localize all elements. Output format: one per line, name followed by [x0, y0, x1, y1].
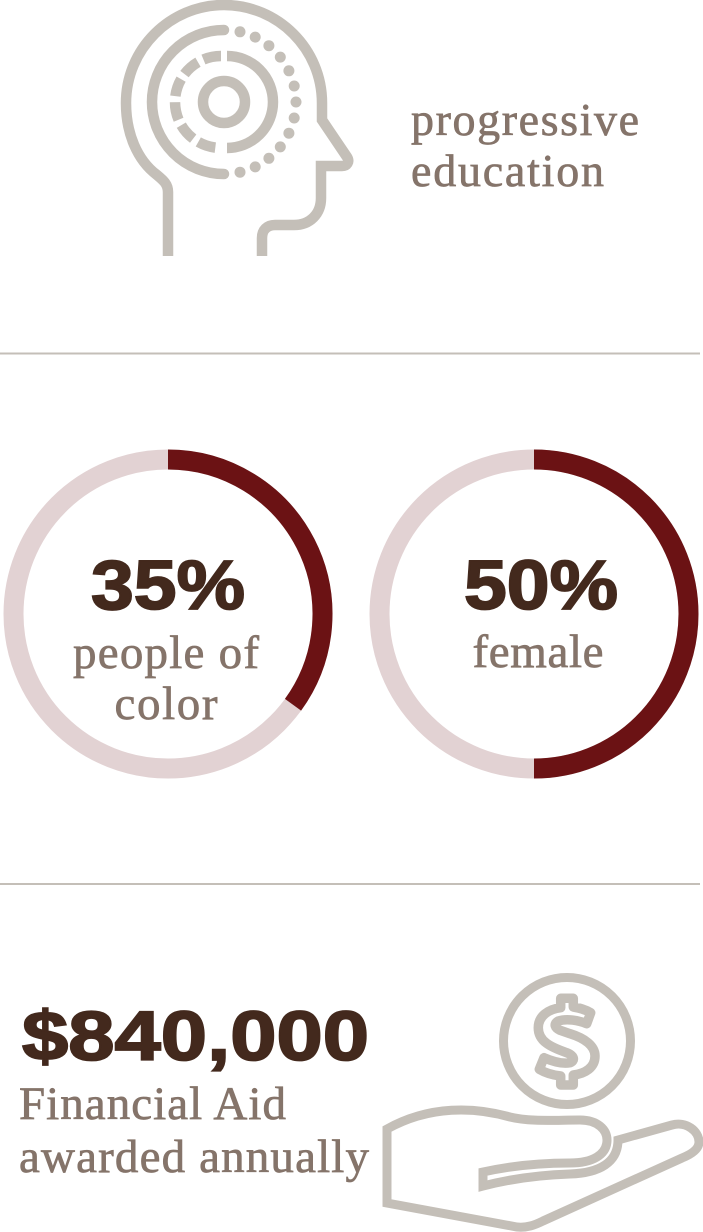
- stat: $840,000 financial aid: awarded annually: [19, 1131, 370, 1183]
- donut chart: 35% people of color: people of: [73, 627, 259, 679]
- heading: progressive education: progressive: [411, 94, 639, 145]
- icon: hand holding coin: [387, 978, 699, 1227]
- heading: progressive education: [411, 94, 639, 196]
- heading: progressive education: education: [411, 145, 604, 196]
- icon: head with concentric circles: [126, 5, 348, 256]
- donut chart: 35% people of color: 35%: [91, 546, 245, 624]
- stat: $840,000 financial aid: [19, 997, 370, 1183]
- donut chart: 50% female: 50%: [464, 546, 618, 624]
- donut chart: 50% female: [380, 460, 688, 768]
- donut chart: 50% female: female: [472, 626, 604, 678]
- donut chart: 35% people of color: color: [114, 678, 218, 730]
- stat: $840,000 financial aid: Financial Aid: [19, 1078, 286, 1130]
- donut chart: 35% people of color: [14, 460, 322, 768]
- stat: $840,000 financial aid: $840,000: [22, 997, 369, 1075]
